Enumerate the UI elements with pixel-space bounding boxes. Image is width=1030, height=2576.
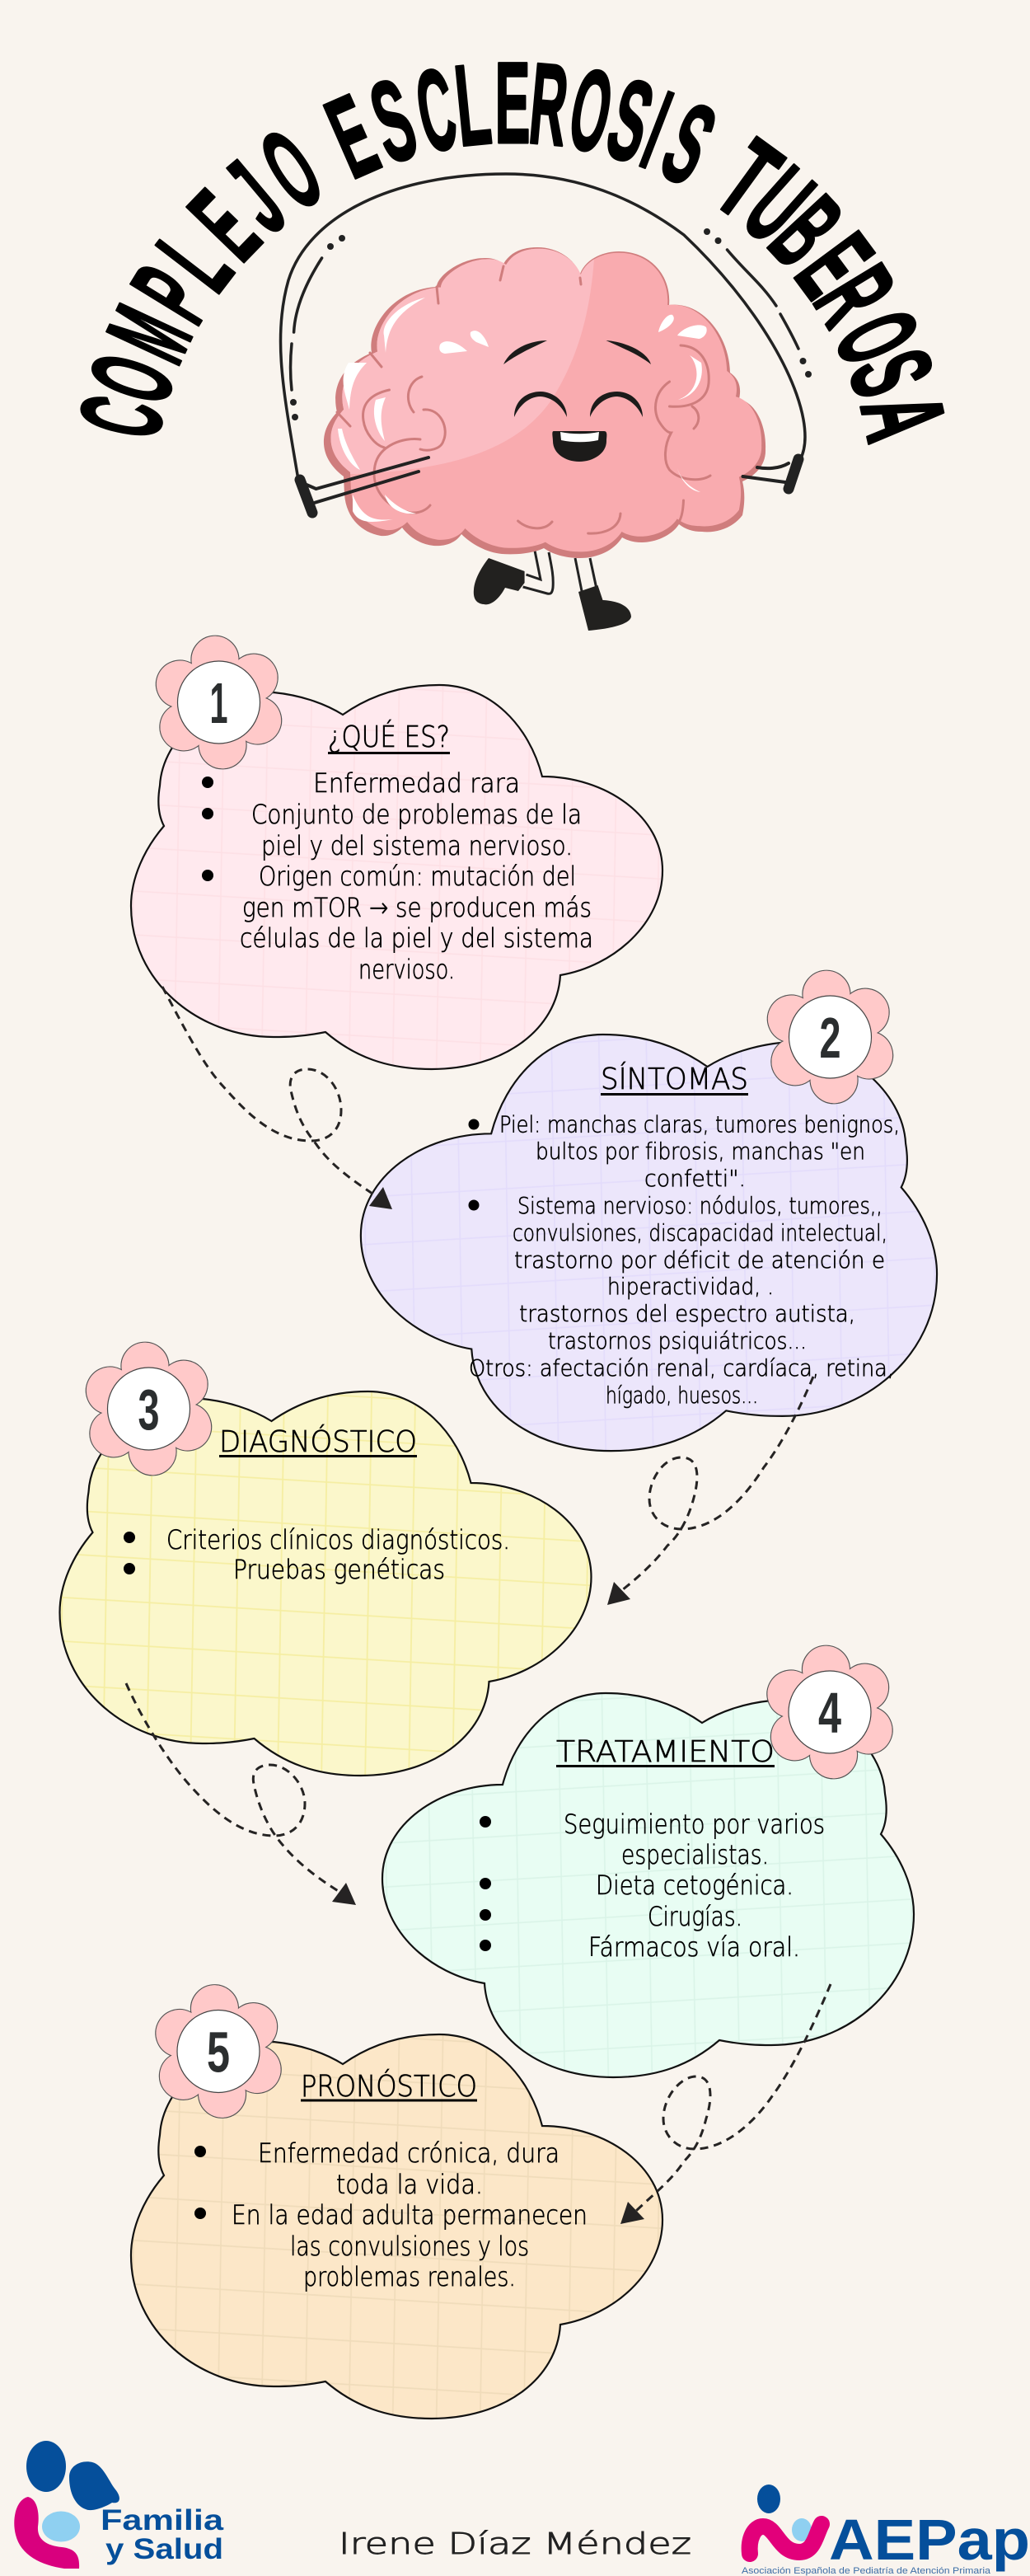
- teeth: [560, 432, 599, 442]
- body text: Piel: manchas claras, tumores benignos,: [499, 1111, 900, 1138]
- body text: confetti".: [644, 1165, 746, 1192]
- title: curved heading: R: [790, 246, 920, 345]
- brain body: [324, 247, 765, 558]
- body text: [240, 767, 593, 985]
- body text: [564, 1809, 825, 1963]
- title: curved heading: L: [134, 208, 256, 312]
- cloud shape: [361, 1035, 937, 1451]
- body text: Pruebas genéticas: [233, 1554, 445, 1585]
- body text: Cirugías.: [648, 1901, 742, 1932]
- title: curved heading: T: [695, 116, 802, 243]
- body text: Enfermedad crónica, dura: [258, 2137, 559, 2169]
- handles: [300, 459, 798, 513]
- title: curved heading: M: [82, 289, 216, 379]
- heading: SÍNTOMAS: [601, 1062, 748, 1096]
- title: curved heading: J: [203, 138, 307, 255]
- panel: tratamiento: [382, 1644, 914, 2077]
- logo text: [101, 2504, 224, 2565]
- badge: number 4: 4: [818, 1681, 841, 1745]
- body text: Sistema nervioso: nódulos, tumores,,: [517, 1192, 883, 1219]
- badge: number 1: 1: [209, 671, 227, 735]
- motion dashes: [290, 250, 798, 390]
- badge: number 2: [760, 969, 901, 1105]
- badge: number 2: 2: [819, 1006, 840, 1070]
- body text: Dieta cetogénica.: [596, 1870, 794, 1901]
- author name: Irene Díaz Méndez: [339, 2527, 691, 2561]
- title: curved heading: [54, 38, 970, 451]
- arrow: step 4 to 5: [620, 1984, 831, 2224]
- title: curved heading: S: [358, 54, 429, 189]
- body text: Seguimiento por varios: [564, 1809, 825, 1840]
- cloud shape: [59, 1391, 592, 1776]
- title: curved heading: U: [722, 144, 836, 265]
- body text: problemas renales.: [303, 2261, 516, 2292]
- panel: ¿qué es?: [131, 634, 662, 1069]
- cloud shape: [131, 685, 662, 1069]
- body text: Origen común: mutación del: [259, 861, 576, 892]
- title: curved heading: O: [65, 340, 199, 416]
- logo text: Familia: [101, 2504, 224, 2536]
- title: curved heading: E: [772, 213, 897, 318]
- mouth: [552, 431, 606, 462]
- title: curved heading: B: [747, 174, 867, 289]
- eyes: [514, 392, 643, 417]
- body text: Conjunto de problemas de la: [251, 799, 582, 830]
- badge: number 1: [148, 634, 289, 771]
- bullets: [124, 1532, 135, 1574]
- brain highlights: [338, 298, 707, 522]
- logo: Familia y Salud: [14, 2441, 224, 2569]
- body text: Otros: afectación renal, cardíaca, retina,: [469, 1354, 894, 1382]
- logo wordmark: AEPap: [829, 2508, 1030, 2572]
- title: curved heading: I: [628, 67, 686, 192]
- body text: Fármacos vía oral.: [588, 1931, 800, 1963]
- bullets: [202, 777, 213, 881]
- illustration: brain jumping rope: [280, 174, 812, 631]
- title: curved heading: P: [108, 246, 234, 341]
- body text: Criterios clínicos diagnósticos.: [166, 1524, 510, 1555]
- logo tagline: Asociación Española de Pediatría de Atención Primaria: [742, 2566, 991, 2576]
- heading: PRONÓSTICO: [301, 2069, 477, 2104]
- eyebrows: [503, 340, 651, 364]
- arrow: step 2 to 3: [607, 1377, 813, 1605]
- title: curved heading: C: [54, 386, 188, 448]
- badge: number 5: 5: [207, 2020, 230, 2084]
- body text: [232, 2137, 588, 2292]
- badge: number 4: [759, 1644, 901, 1781]
- logo text: y Salud: [105, 2533, 223, 2565]
- arrow: step 3 to 4: [126, 1683, 356, 1905]
- shoes: [474, 558, 631, 631]
- logo mark: [750, 2485, 822, 2554]
- heading: DIAGNÓSTICO: [219, 1424, 417, 1459]
- jump rope: [280, 174, 805, 480]
- arrow: step 1 to 2: [162, 987, 392, 1209]
- panel: síntomas: [361, 969, 937, 1451]
- bullets: [480, 1816, 491, 1951]
- badge: number 3: [78, 1340, 219, 1477]
- cloud shape: [131, 2034, 662, 2419]
- heading: TRATAMIENTO: [556, 1735, 775, 1769]
- title: curved heading: S: [824, 335, 957, 411]
- motion dots: [290, 228, 812, 420]
- body text: células de la piel y del sistema: [240, 922, 593, 954]
- body text: [166, 1524, 510, 1585]
- panel: diagnóstico: [59, 1340, 592, 1776]
- body text: especialistas.: [621, 1839, 769, 1870]
- title: curved heading: A: [836, 382, 970, 451]
- body text: piel y del sistema nervioso.: [261, 830, 573, 861]
- body text: bultos por fibrosis, manchas "en: [536, 1138, 865, 1165]
- body text: las convulsiones y los: [290, 2231, 529, 2262]
- title: curved heading: E: [311, 71, 395, 203]
- body text: hiperactividad, .: [607, 1273, 774, 1300]
- body text: [469, 1111, 900, 1409]
- body text: gen mTOR → se producen más: [242, 892, 592, 923]
- title: curved heading: E: [495, 39, 530, 168]
- legs: [523, 547, 597, 594]
- title: curved heading: O: [811, 293, 943, 382]
- badge: number 3: 3: [138, 1377, 160, 1442]
- body text: trastornos del espectro autista,: [519, 1300, 855, 1327]
- body text: Enfermedad rara: [313, 767, 520, 799]
- body text: convulsiones, discapacidad intelectual,: [513, 1219, 887, 1246]
- body text: nervioso.: [358, 954, 455, 985]
- title: curved heading: O: [559, 44, 622, 177]
- logo: AEPap: [742, 2485, 1030, 2576]
- body text: En la edad adulta permanecen: [232, 2199, 588, 2231]
- badge: number 5: [147, 1982, 289, 2120]
- title: curved heading: S: [644, 78, 733, 210]
- title: curved heading: O: [240, 106, 343, 233]
- title: curved heading: E: [166, 168, 283, 282]
- title: curved heading: C: [406, 44, 466, 177]
- bullets: [194, 2146, 206, 2219]
- body text: hígado, huesos...: [606, 1382, 758, 1409]
- body text: toda la vida.: [336, 2169, 483, 2200]
- arms: [307, 457, 789, 503]
- bullets: [468, 1119, 480, 1210]
- brain folds: [337, 266, 710, 533]
- body text: trastornos psiquiátricos...: [548, 1327, 807, 1354]
- heading: ¿QUÉ ES?: [328, 720, 450, 754]
- body text: trastorno por déficit de atención e: [514, 1246, 885, 1274]
- title: curved heading: R: [525, 38, 573, 170]
- panel: pronóstico: [131, 1982, 662, 2419]
- title: curved heading: S: [594, 54, 666, 188]
- logo mark: [14, 2441, 119, 2569]
- cloud shape: [382, 1693, 914, 2077]
- title: curved heading: L: [450, 40, 496, 171]
